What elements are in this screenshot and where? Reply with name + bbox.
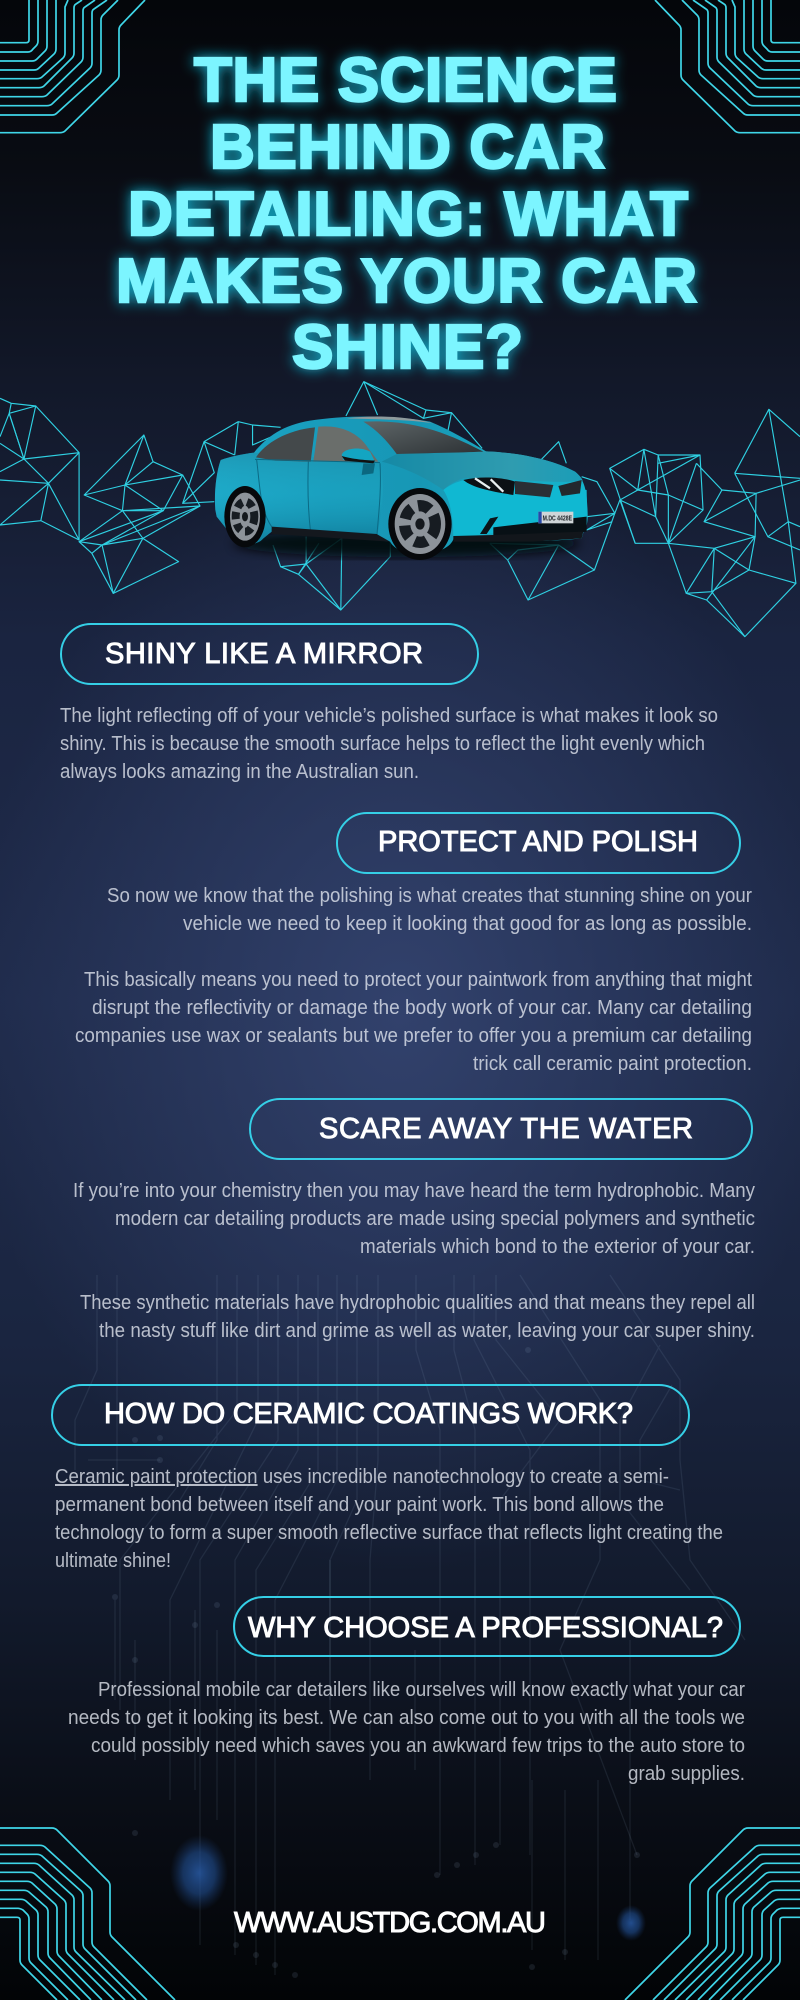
glow blob right: [616, 1905, 646, 1941]
hood: [382, 451, 583, 490]
title: [116, 46, 697, 382]
headlight: [463, 477, 515, 495]
body text: how do ceramic coatings work: ultimate shine!: [55, 1550, 171, 1572]
body text: shiny like a mirror: [60, 705, 718, 783]
wireframe polygons behind car: [0, 382, 800, 637]
body text: why choose a professional: could possibly need which saves you an awkward few trips to the auto store to: [91, 1735, 745, 1757]
front fascia: [443, 478, 587, 538]
section 5: why choose a professional: [68, 1597, 745, 1785]
body text: why choose a professional: needs to get it looking its best. We can also come out to you with all the tools we: [68, 1707, 745, 1729]
circuit board background pattern: [75, 1275, 745, 1975]
rear window: [256, 427, 315, 462]
roof highlight: [347, 417, 433, 423]
body text: how do ceramic coatings work: technology to form a super smooth reflective surface that reflects light creating the: [55, 1522, 723, 1544]
front wheel: [388, 488, 452, 560]
title: THE SCIENCE: [194, 46, 617, 115]
title: BEHIND CAR: [210, 113, 605, 182]
pill heading: shiny like a mirror: SHINY LIKE A MIRROR: [105, 638, 423, 670]
title: MAKES YOUR CAR: [116, 247, 697, 316]
door lines: [255, 459, 380, 538]
body text: scare away the water: If you’re into your chemistry then you may have heard the term hydrophobic. Many: [73, 1180, 755, 1202]
lower intake: [493, 517, 587, 538]
corner circuit lines: bottom left: [0, 1828, 175, 2000]
body text: how do ceramic coatings work: permanent bond between itself and your paint work. This bond allows the: [55, 1494, 664, 1516]
footer website: WWW.AUSTDG.COM.AU: [234, 1907, 546, 1939]
body text: protect and polish: vehicle we need to keep it looking that good for as long as possible.: [183, 913, 752, 935]
title: SHINE?: [292, 313, 523, 382]
circuit node dots: [112, 1347, 640, 1978]
pill heading: why choose a professional: [234, 1597, 740, 1656]
body text: how do ceramic coatings work: Ceramic paint protection uses incredible nanotechnology to create a semi-: [55, 1466, 669, 1488]
pill heading: protect and polish: PROTECT AND POLISH: [378, 826, 698, 858]
car illustration: [215, 417, 588, 560]
corner circuit lines: top left: [0, 0, 145, 133]
pill heading: how do ceramic coatings work: HOW DO CERAMIC COATINGS WORK?: [104, 1398, 633, 1430]
body text: shiny like a mirror: shiny. This is because the smooth surface helps to reflect the light evenly which: [60, 733, 705, 755]
body text: scare away the water: materials which bond to the exterior of your car.: [360, 1236, 755, 1258]
body text: scare away the water: the nasty stuff like dirt and grime as well as water, leaving your car super shiny.: [99, 1320, 755, 1342]
body text: protect and polish: [75, 885, 752, 1075]
pill heading: protect and polish: [337, 813, 740, 873]
side sill: [272, 527, 390, 542]
pill heading: scare away the water: [250, 1099, 752, 1159]
glow blob left: [170, 1835, 228, 1911]
corner circuit lines: top right: [655, 0, 800, 133]
body text: shiny like a mirror: always looks amazing in the Australian sun.: [60, 761, 419, 783]
windshield: [363, 421, 483, 454]
body text: protect and polish: companies use wax or sealants but we prefer to offer you a premium car detailing: [75, 1025, 752, 1047]
car body: [215, 417, 588, 554]
section 1: shiny like a mirror: [60, 624, 718, 783]
body text: protect and polish: So now we know that the polishing is what creates that stunning shine on your: [107, 885, 752, 907]
car shadow: [233, 529, 580, 557]
title: DETAILING: WHAT: [128, 180, 688, 249]
mirror: [342, 448, 375, 462]
pill heading: scare away the water: SCARE AWAY THE WATER: [319, 1113, 693, 1145]
licence plate: M.DC 4428E: [543, 513, 572, 522]
body text: why choose a professional: [68, 1679, 745, 1785]
body text: protect and polish: disrupt the reflectivity or damage the body work of your car. Many car detailing: [92, 997, 752, 1019]
front side window: [313, 426, 378, 462]
body text: scare away the water: modern car detailing products are made using special polymers and synthetic: [115, 1208, 755, 1230]
body text: why choose a professional: Professional mobile car detailers like ourselves will know exactly what your car: [98, 1679, 745, 1701]
body text: protect and polish: trick call ceramic paint protection.: [473, 1053, 752, 1075]
section 3: scare away the water: [73, 1099, 755, 1342]
body text: shiny like a mirror: The light reflecting off of your vehicle’s polished surface is what makes it look so: [60, 705, 718, 727]
pill heading: shiny like a mirror: [61, 624, 478, 684]
body shading: [215, 453, 383, 544]
licence plate: [538, 512, 573, 523]
section 2: protect and polish: [75, 813, 752, 1075]
rear wheel: [224, 486, 266, 547]
pill heading: why choose a professional: WHY CHOOSE A PROFESSIONAL?: [248, 1612, 723, 1644]
body text: scare away the water: These synthetic materials have hydrophobic qualities and that means they repel all: [80, 1292, 755, 1314]
section 4: how do ceramic coatings work: [52, 1385, 723, 1572]
corner circuit lines: bottom right: [625, 1828, 800, 2000]
body text: protect and polish: This basically means you need to protect your paintwork from anything that might: [84, 969, 752, 991]
body text: how do ceramic coatings work: [55, 1466, 723, 1572]
body text: why choose a professional: grab supplies.: [628, 1763, 745, 1785]
pill heading: how do ceramic coatings work: [52, 1385, 689, 1445]
body text: scare away the water: [73, 1180, 755, 1342]
grille: [515, 481, 553, 497]
